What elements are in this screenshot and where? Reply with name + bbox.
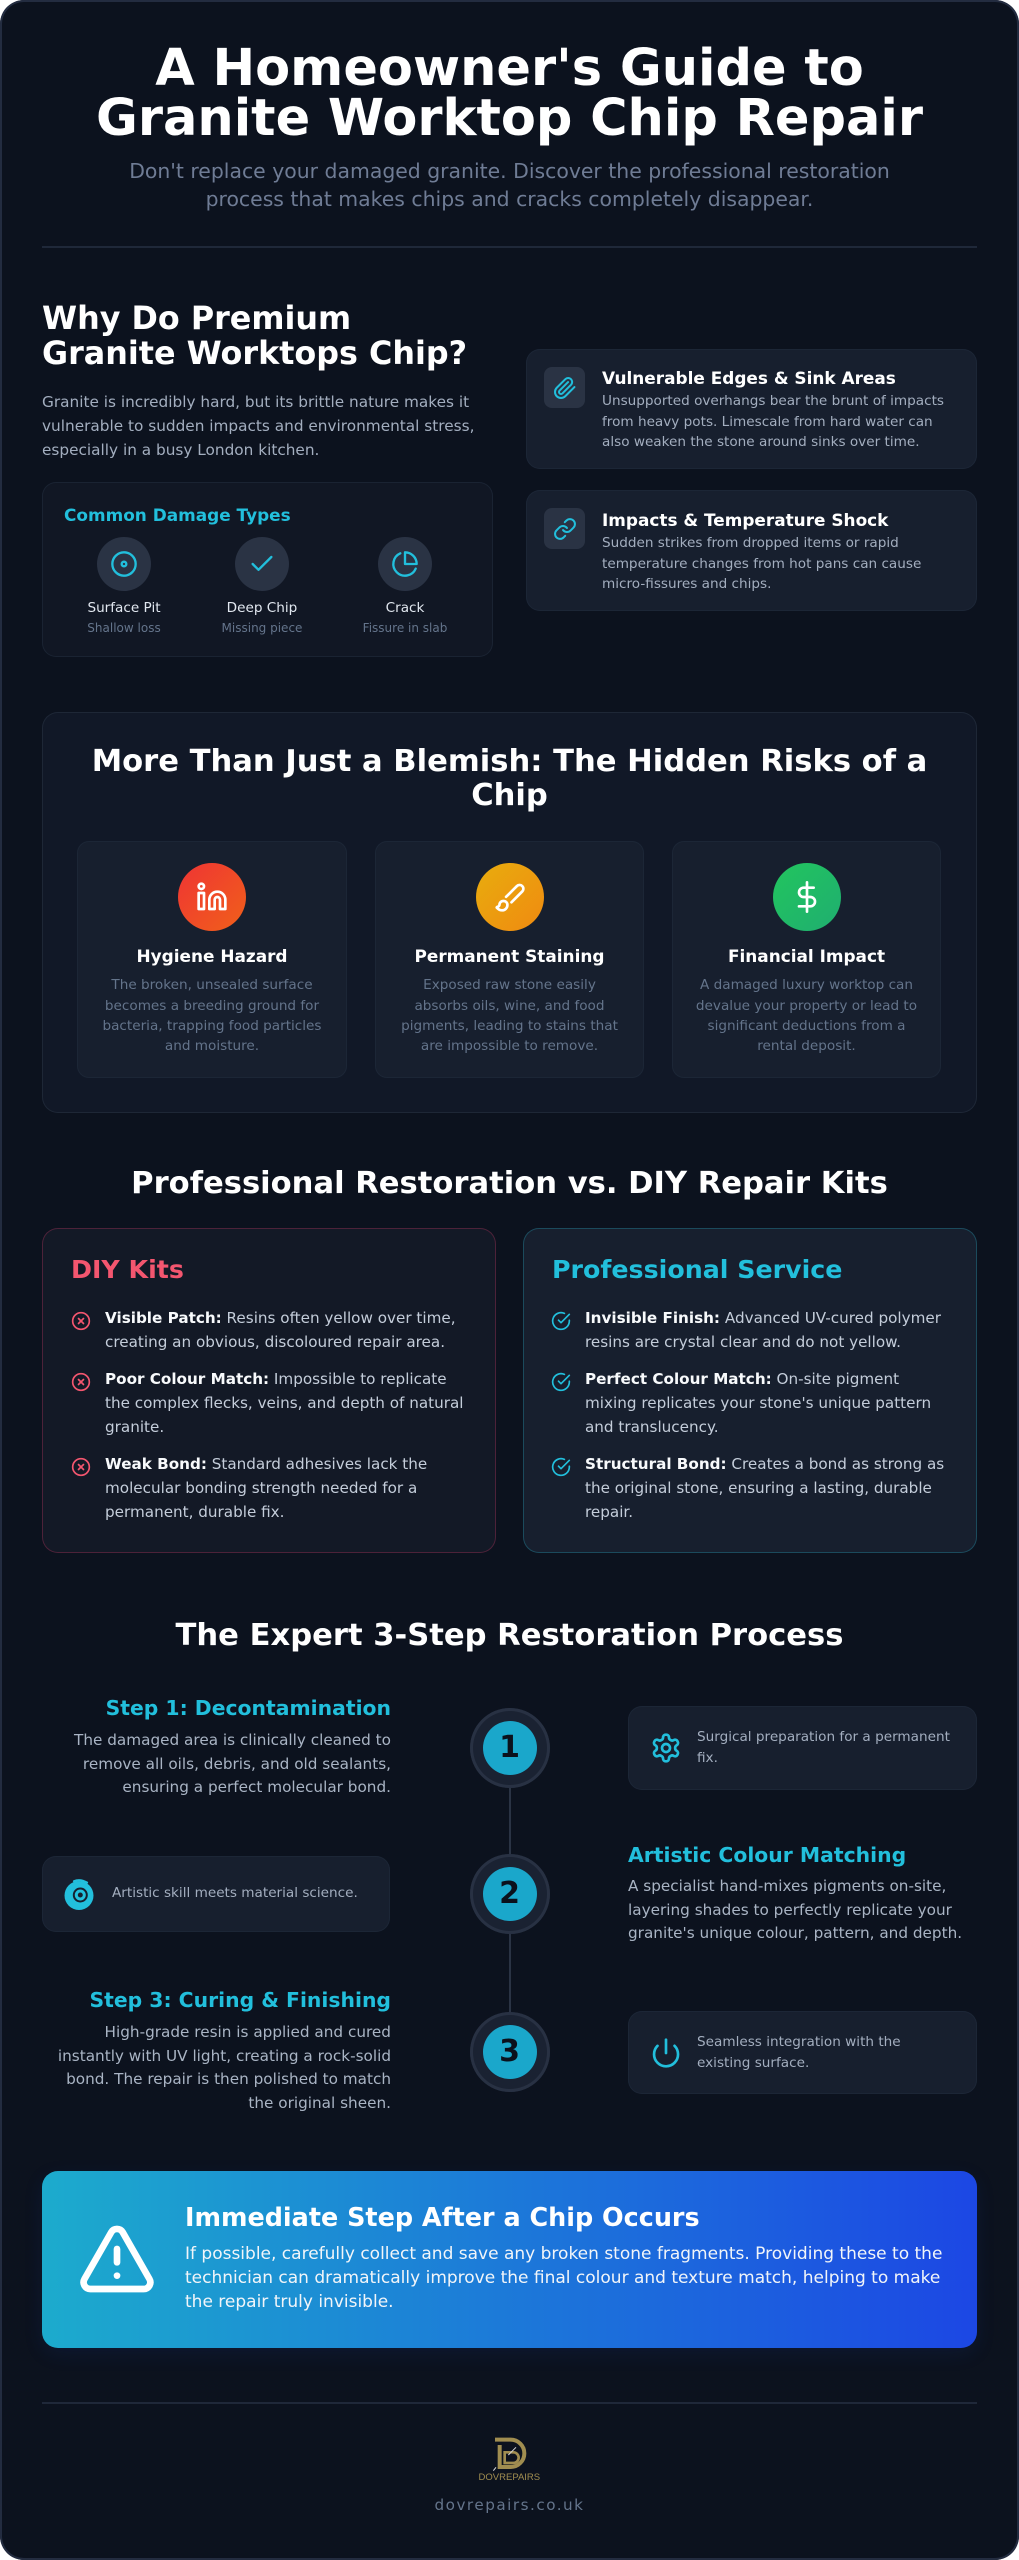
intro paragraph: Granite is incredibly hard, but its brittle nature makes it	[42, 393, 469, 411]
risk card: hygiene hazard	[77, 841, 347, 1078]
item text: granite.	[105, 1418, 164, 1436]
intro paragraph	[42, 393, 474, 459]
risk text: Exposed raw stone easily	[423, 977, 596, 993]
item text: Perfect Colour Match: On-site pigment	[585, 1370, 899, 1388]
step 3 description	[58, 2023, 391, 2112]
step 1 text	[74, 1696, 391, 1796]
card text: temperature changes from hot pans can cause	[602, 556, 921, 572]
icon: dollar	[773, 863, 841, 931]
card text: also weaken the stone around sinks over time.	[602, 434, 920, 450]
step 1 side note	[628, 1706, 977, 1790]
intro paragraph: especially in a busy London kitchen.	[42, 441, 319, 459]
note text: fix.	[697, 1750, 718, 1766]
step 2 description: granite's unique colour, pattern, and depth.	[628, 1924, 962, 1942]
step 3 number: 3	[499, 2034, 520, 2069]
item text: mixing replicates your stone's unique pattern	[585, 1394, 931, 1412]
card text: Sudden strikes from dropped items or rapid	[602, 535, 899, 551]
icon: warning triangle	[77, 2219, 157, 2299]
item text: the original stone, ensuring a lasting, durable	[585, 1479, 932, 1497]
item text	[585, 1370, 931, 1436]
item text: resins are crystal clear and do not yellow.	[585, 1333, 901, 1351]
damage type: surface pit	[87, 537, 161, 635]
risk text: and moisture.	[165, 1038, 259, 1054]
step 1 number	[470, 1708, 550, 1788]
panel: vulnerable edges	[526, 349, 977, 469]
caption: shallow loss: Shallow loss	[87, 621, 161, 635]
item text: Invisible Finish: Advanced UV-cured polymer	[585, 1309, 941, 1327]
icon: cross	[72, 1312, 90, 1330]
professional heading: Professional Service	[552, 1255, 842, 1284]
icon: cross	[72, 1372, 90, 1392]
note text: Surgical preparation for a permanent	[697, 1729, 950, 1745]
item text: Poor Colour Match: Impossible to replicate	[105, 1370, 447, 1388]
item text	[585, 1309, 941, 1351]
risk title: Financial Impact	[728, 946, 885, 966]
risk text	[102, 977, 322, 1054]
step 3 number	[470, 2012, 550, 2092]
risk text: are impossible to remove.	[421, 1038, 598, 1054]
label: crack: Crack	[386, 600, 424, 616]
step 2 side note	[42, 1856, 390, 1932]
heading: process: The Expert 3-Step Restoration Process	[176, 1618, 843, 1653]
heading: hidden risks	[92, 744, 927, 813]
icon: crack	[378, 537, 432, 591]
heading: why granite chips: Why Do Premium	[42, 300, 351, 337]
title: A Homeowner's Guide to	[155, 39, 864, 98]
icon: surface pit	[97, 537, 151, 591]
icon: check	[552, 1458, 570, 1476]
step 1 description: The damaged area is clinically cleaned to	[74, 1731, 391, 1749]
heading: hidden risks: Chip	[471, 778, 548, 813]
damage types heading: Common Damage Types	[64, 505, 291, 525]
item text	[105, 1370, 464, 1436]
risk text: The broken, unsealed surface	[111, 977, 313, 993]
risk card: financial impact	[672, 841, 941, 1078]
step 1 title: Step 1: Decontamination	[106, 1696, 391, 1720]
step 3 text	[58, 1988, 391, 2112]
step 2 number	[470, 1854, 550, 1934]
risk text	[401, 977, 618, 1054]
step 2 description	[628, 1877, 962, 1942]
step 3 description: bond. The repair is then polished to match	[66, 2070, 391, 2088]
step 2 title: Artistic Colour Matching	[628, 1843, 906, 1867]
title: Granite Worktop Chip Repair	[96, 89, 923, 148]
logo: Dovrepairs: DOVREPAIRS	[479, 2472, 540, 2483]
item text: Structural Bond: Creates a bond as strong as	[585, 1455, 944, 1473]
panel: hidden risks	[42, 712, 977, 1113]
risk text: devalue your property or lead to	[696, 998, 917, 1014]
icon: gear	[652, 1733, 680, 1763]
callout title: Immediate Step After a Chip Occurs	[185, 2203, 700, 2233]
item text: Weak Bond: Standard adhesives lack the	[105, 1455, 427, 1473]
risk text: A damaged luxury worktop can	[700, 977, 913, 993]
risk title: Permanent Staining	[414, 946, 604, 966]
heading: comparison: Professional Restoration vs. DIY Repair Kits	[131, 1166, 888, 1201]
risk text: rental deposit.	[757, 1038, 856, 1054]
card text	[602, 393, 944, 450]
item text: permanent, durable fix.	[105, 1503, 284, 1521]
card text: Unsupported overhangs bear the brunt of impacts	[602, 393, 944, 409]
icon: deep chip	[235, 537, 289, 591]
icon: check	[552, 1312, 570, 1330]
website: dovrepairs.co.uk	[435, 2496, 584, 2514]
icon: power	[650, 2037, 682, 2069]
card title: Impacts & Temperature Shock	[602, 510, 888, 530]
heading: hidden risks: More Than Just a Blemish: The Hidden Risks of a	[92, 744, 927, 779]
risk text: bacteria, trapping food particles	[102, 1018, 322, 1034]
item text: creating an obvious, discoloured repair area.	[105, 1333, 445, 1351]
item text: Visible Patch: Resins often yellow over time,	[105, 1309, 456, 1327]
icon: hygiene	[178, 863, 246, 931]
step 1 description	[74, 1731, 391, 1796]
timeline connector 2	[508, 1932, 510, 2014]
item text: and translucency.	[585, 1418, 719, 1436]
panel: DIY kits	[42, 1228, 496, 1553]
risk text: becomes a breeding ground for	[105, 998, 319, 1014]
logo: Dovrepairs	[420, 2390, 600, 2510]
risk text	[696, 977, 917, 1054]
icon: link	[544, 508, 585, 549]
item: poor colour match	[72, 1370, 464, 1436]
risk text: significant deductions from a	[708, 1018, 905, 1034]
risk text: absorbs oils, wine, and food	[414, 998, 605, 1014]
timeline connector 1	[508, 1786, 510, 1856]
risk text: pigments, leading to stains that	[401, 1018, 618, 1034]
note text: Seamless integration with the	[697, 2034, 901, 2050]
label: surface pit: Surface Pit	[87, 600, 161, 616]
intro paragraph: vulnerable to sudden impacts and environmental stress,	[42, 417, 474, 435]
step 1 description: ensuring a perfect molecular bond.	[122, 1778, 391, 1796]
note text: existing surface.	[697, 2054, 809, 2070]
step 1 number: 1	[499, 1730, 520, 1765]
callout: immediate step	[42, 2171, 977, 2348]
step 3 title: Step 3: Curing & Finishing	[89, 1988, 391, 2012]
panel: common damage types	[42, 482, 493, 657]
step 2 number: 2	[499, 1876, 520, 1911]
risk card: permanent staining	[375, 841, 644, 1078]
step 3 description: High-grade resin is applied and cured	[105, 2023, 391, 2041]
item text	[585, 1455, 944, 1521]
step 2 description: layering shades to perfectly replicate your	[628, 1901, 952, 1919]
callout text: the repair truly invisible.	[185, 2292, 394, 2312]
item text	[105, 1455, 427, 1521]
panel: impacts and temperature shock	[526, 490, 977, 611]
label: deep chip: Deep Chip	[227, 600, 297, 616]
DIY heading: DIY Kits	[71, 1255, 184, 1284]
item text	[105, 1309, 456, 1351]
callout text: If possible, carefully collect and save any broken stone fragments. Providing these to the	[185, 2244, 942, 2264]
item: invisible finish	[552, 1309, 941, 1351]
icon: cross	[72, 1458, 90, 1476]
item: visible patch	[72, 1309, 456, 1351]
subtitle: Don't replace your damaged granite. Discover the professional restoration	[129, 159, 890, 183]
subtitle	[129, 159, 890, 211]
item text: molecular bonding strength needed for a	[105, 1479, 417, 1497]
item text: repair.	[585, 1503, 633, 1521]
item: weak bond	[72, 1455, 427, 1521]
item: structural bond	[552, 1455, 944, 1521]
step 1 description: remove all oils, debris, and old sealants,	[83, 1755, 391, 1773]
note text	[697, 1729, 950, 1766]
risk title: Hygiene Hazard	[136, 946, 288, 966]
icon: check	[552, 1372, 570, 1392]
icon: swirl	[64, 1879, 94, 1910]
item: perfect colour match	[552, 1370, 931, 1436]
item text: the complex flecks, veins, and depth of natural	[105, 1394, 464, 1412]
card title: Vulnerable Edges & Sink Areas	[602, 368, 896, 388]
step 2 description: A specialist hand-mixes pigments on-site,	[628, 1877, 946, 1895]
step 2 text	[628, 1843, 962, 1942]
card text: micro-fissures and chips.	[602, 576, 771, 592]
step 3 side note	[628, 2011, 977, 2094]
subtitle: process that makes chips and cracks completely disappear.	[206, 187, 813, 211]
caption: missing piece: Missing piece	[222, 621, 302, 635]
step 3 description: instantly with UV light, creating a rock-solid	[58, 2047, 391, 2065]
card text: from heavy pots. Limescale from hard water can	[602, 414, 933, 430]
heading: why granite chips: Granite Worktops Chip?	[42, 335, 467, 372]
icon: brush	[476, 863, 544, 931]
callout text: technician can dramatically improve the final colour and texture match, helping to make	[185, 2268, 940, 2288]
callout text	[185, 2242, 942, 2314]
panel: professional service	[523, 1228, 977, 1553]
step 3 description: the original sheen.	[248, 2094, 391, 2112]
heading: why granite chips	[42, 300, 467, 372]
caption: fissure in slab: Fissure in slab	[363, 621, 447, 635]
card text	[602, 535, 921, 592]
damage type: deep chip	[222, 537, 302, 635]
icon: paperclip	[544, 367, 585, 408]
note text: Artistic skill meets material science.	[112, 1885, 358, 1901]
note text	[697, 2032, 901, 2073]
damage type: crack	[363, 537, 447, 635]
title	[96, 39, 923, 148]
